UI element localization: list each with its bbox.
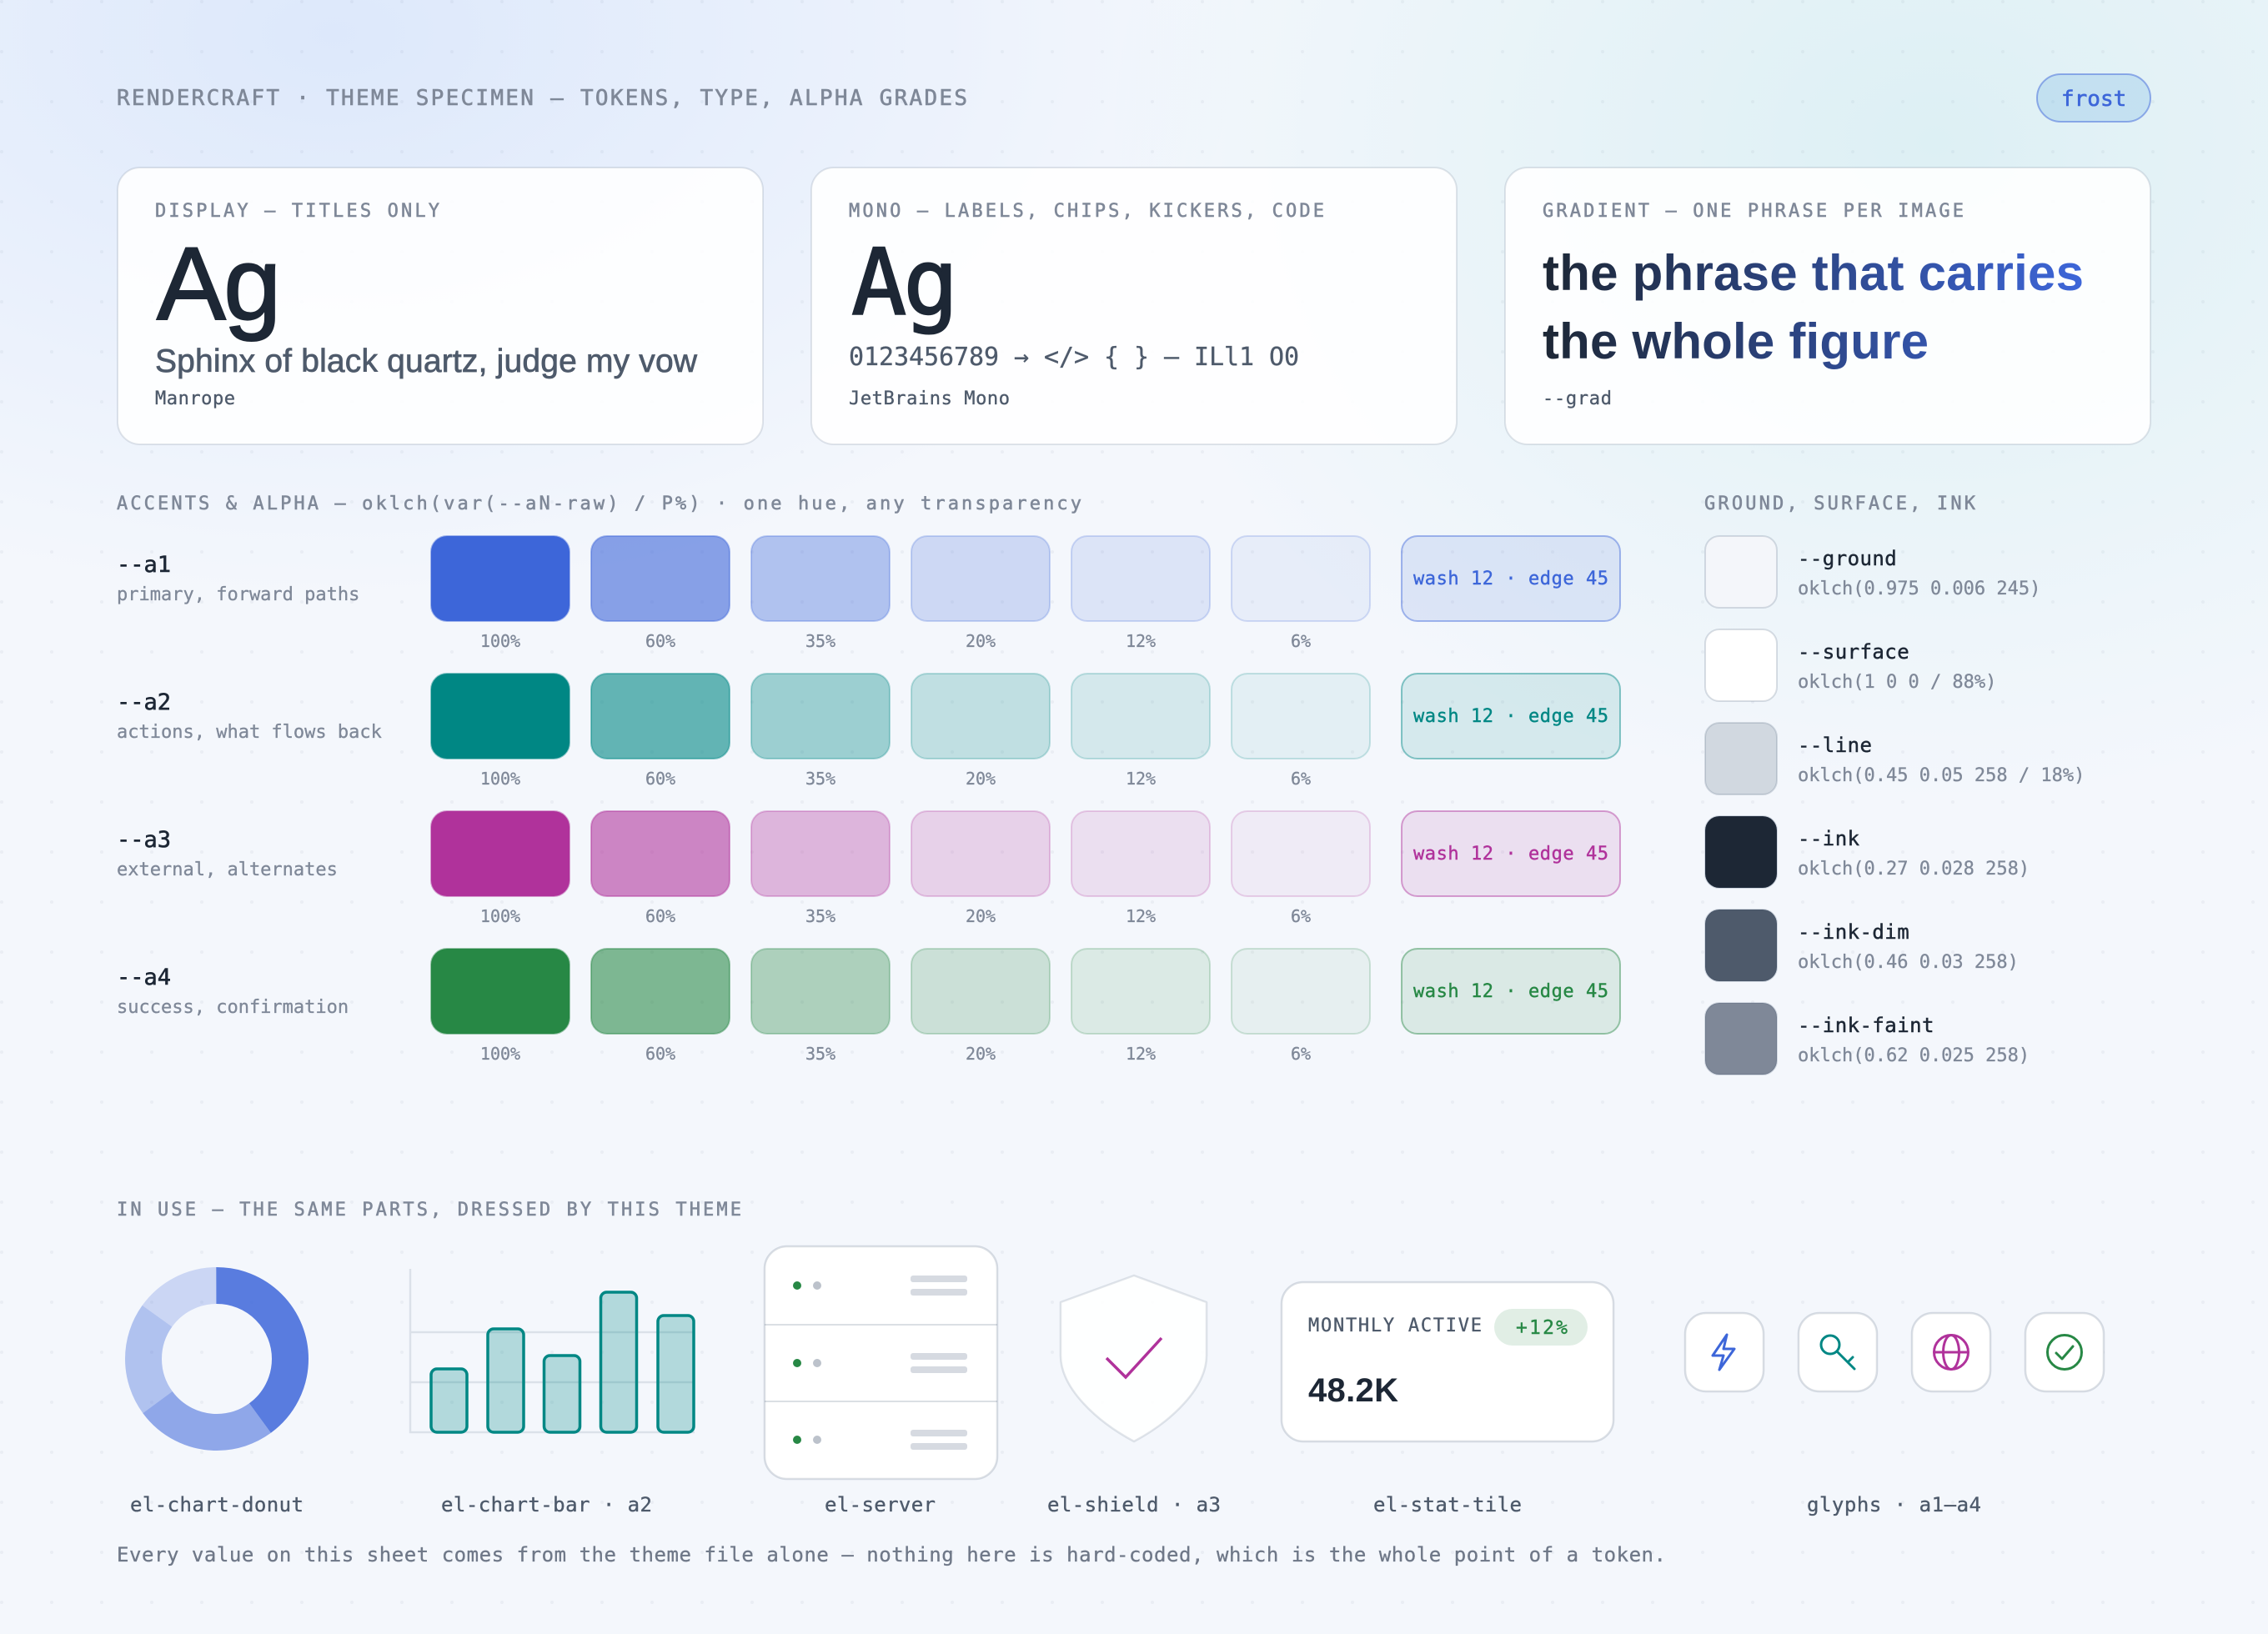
percent labels: a4: 60% — [645, 1044, 675, 1064]
token: ground — [1705, 536, 2040, 608]
token: ink: --ink — [1798, 827, 1860, 850]
percent labels: a3: 12% — [1126, 906, 1156, 926]
percent labels: a3: 100% — [480, 906, 520, 926]
label: a4: success, confirmation — [117, 997, 349, 1018]
kicker: mono: MONO — LABELS, CHIPS, KICKERS, CODE — [849, 201, 1324, 222]
element: stat tile — [1282, 1282, 1613, 1441]
token: ink: oklch(0.27 0.028 258) — [1798, 859, 2030, 880]
captions: element names: el-chart-donut — [130, 1493, 304, 1516]
percent labels: a4: 20% — [966, 1044, 996, 1064]
element: shield — [1061, 1276, 1207, 1441]
label: a3 — [117, 827, 338, 880]
alpha swatches: a3 — [431, 811, 1370, 896]
percent labels: a2: 100% — [480, 769, 520, 789]
wash chip: a4: wash 12 · edge 45 — [1413, 981, 1608, 1002]
percent labels: a1 — [480, 631, 1311, 651]
panel: accent a2 row — [117, 674, 1620, 789]
token: line — [1705, 723, 2085, 794]
token: ink-faint — [1705, 1003, 2030, 1075]
chart: bar — [410, 1269, 695, 1432]
wash chip: a3 — [1402, 811, 1620, 896]
token: ink-dim: oklch(0.46 0.03 258) — [1798, 952, 2019, 973]
percent labels: a3: 60% — [645, 906, 675, 926]
panel: display type card — [118, 168, 763, 444]
captions: element names: el-server — [825, 1493, 936, 1516]
font name: JetBrains Mono: JetBrains Mono — [849, 388, 1010, 409]
label: a1: --a1 — [117, 552, 171, 578]
glyph sample line: 0123456789 → </> { } — ILl1 O0 — [849, 343, 1299, 372]
label: a4: --a4 — [117, 965, 171, 990]
captions: element names — [130, 1493, 1981, 1516]
percent labels: a4 — [480, 1044, 1311, 1064]
alpha swatches: a1 — [431, 536, 1370, 621]
token: ink-faint: --ink-faint — [1798, 1014, 1934, 1037]
heading: ground surface ink: GROUND, SURFACE, INK — [1704, 494, 1976, 514]
specimen: display Ag: Ag — [157, 227, 279, 342]
kicker: display: DISPLAY — TITLES ONLY — [155, 201, 439, 222]
percent labels: a2: 12% — [1126, 769, 1156, 789]
badge: frost theme pill — [2037, 74, 2150, 122]
stat value: 48.2K — [1308, 1372, 1398, 1409]
percent labels: a1: 12% — [1126, 631, 1156, 651]
token: ink-dim: --ink-dim — [1798, 920, 1909, 944]
panel: accent a1 row — [117, 536, 1620, 651]
wash chip: a1: wash 12 · edge 45 — [1413, 569, 1608, 589]
token: surface: oklch(1 0 0 / 88%) — [1798, 672, 1996, 693]
label: a1 — [117, 552, 359, 605]
percent labels: a2: 20% — [966, 769, 996, 789]
wash chip: a2 — [1402, 674, 1620, 759]
title: page kicker: RENDERCRAFT · THEME SPECIMEN — TOKENS, TYPE, ALPHA GRADES — [117, 86, 967, 111]
label: a3: external, alternates — [117, 860, 338, 880]
percent labels: a3: 6% — [1291, 906, 1311, 926]
captions: element names: el-stat-tile — [1373, 1493, 1522, 1516]
footer note: Every value on this sheet comes from the theme file alone — nothing here is hard-coded, which is the whole point of a token. — [117, 1543, 1666, 1566]
percent labels: a2: 6% — [1291, 769, 1311, 789]
percent labels: a2: 35% — [805, 769, 835, 789]
percent labels: a3: 20% — [966, 906, 996, 926]
token: line: oklch(0.45 0.05 258 / 18%) — [1798, 765, 2085, 786]
heading: in use: IN USE — THE SAME PARTS, DRESSED BY THIS THEME — [117, 1200, 741, 1220]
captions: element names: glyphs · a1–a4 — [1807, 1493, 1981, 1516]
alpha swatches: a4 — [431, 949, 1370, 1034]
alpha swatches: a2 — [431, 674, 1370, 759]
token name: grad: --grad — [1543, 388, 1612, 409]
panel: accent a3 row — [117, 811, 1620, 926]
percent labels: a1: 35% — [805, 631, 835, 651]
element: server — [765, 1246, 997, 1479]
badge: frost theme pill: frost — [2061, 87, 2126, 112]
wash chip: a1 — [1402, 536, 1620, 621]
wash chip: a2: wash 12 · edge 45 — [1413, 706, 1608, 727]
token: line: --line — [1798, 734, 1872, 757]
kicker: gradient: GRADIENT — ONE PHRASE PER IMAGE — [1543, 201, 1964, 222]
percent labels: a4: 35% — [805, 1044, 835, 1064]
percent labels: a4: 12% — [1126, 1044, 1156, 1064]
label: a2 — [117, 689, 382, 743]
label: a1: primary, forward paths — [117, 584, 359, 605]
percent labels: a1: 6% — [1291, 631, 1311, 651]
token: ink — [1705, 816, 2030, 888]
icon: globe — [1912, 1313, 1990, 1391]
stat badge: +12% — [1516, 1317, 1568, 1339]
icon: key — [1799, 1313, 1877, 1391]
captions: element names: el-shield · a3 — [1047, 1493, 1221, 1516]
chart: donut — [143, 1286, 290, 1432]
wash chip: a3: wash 12 · edge 45 — [1413, 844, 1608, 865]
stat badge — [1494, 1309, 1588, 1346]
percent labels: a2 — [480, 769, 1311, 789]
token: ink-dim — [1705, 910, 2019, 981]
font name: Manrope: Manrope — [155, 388, 235, 409]
panel: gradient type card — [1505, 168, 2150, 444]
label: a4 — [117, 965, 349, 1018]
token: surface: --surface — [1798, 640, 1909, 664]
gradient phrase: the whole figure — [1543, 313, 1929, 369]
label: a3: --a3 — [117, 827, 171, 853]
token: ground: oklch(0.975 0.006 245) — [1798, 579, 2040, 599]
token: ground: --ground — [1798, 547, 1897, 570]
percent labels: a4: 6% — [1291, 1044, 1311, 1064]
captions: element names: el-chart-bar · a2 — [441, 1493, 652, 1516]
gradient phrase — [1543, 245, 2084, 369]
specimen: mono Ag: Ag — [851, 229, 955, 336]
icon: bolt — [1685, 1313, 1764, 1391]
percent labels: a1: 100% — [480, 631, 520, 651]
panel: ground surface ink tokens — [1705, 536, 2085, 1075]
wash chip: a4 — [1402, 949, 1620, 1034]
label: a2: --a2 — [117, 689, 171, 715]
percent labels: a2: 60% — [645, 769, 675, 789]
percent labels: a3 — [480, 906, 1311, 926]
percent labels: a1: 60% — [645, 631, 675, 651]
gradient phrase: the phrase that carries — [1543, 245, 2084, 301]
token: surface — [1705, 629, 1996, 701]
percent labels: a3: 35% — [805, 906, 835, 926]
stat label: MONTHLY ACTIVE — [1308, 1316, 1482, 1336]
pangram: Sphinx of black quartz, judge my vow — [155, 343, 698, 379]
label: a2: actions, what flows back — [117, 722, 382, 743]
percent labels: a1: 20% — [966, 631, 996, 651]
icon: check circle — [2025, 1313, 2104, 1391]
percent labels: a4: 100% — [480, 1044, 520, 1064]
heading: accents and alpha: ACCENTS & ALPHA — oklch(var(--aN-raw) / P%) · one hue, any transparency — [117, 494, 1081, 514]
panel: mono type card — [811, 168, 1457, 444]
panel: accent a4 row — [117, 949, 1620, 1064]
token: ink-faint: oklch(0.62 0.025 258) — [1798, 1045, 2030, 1066]
